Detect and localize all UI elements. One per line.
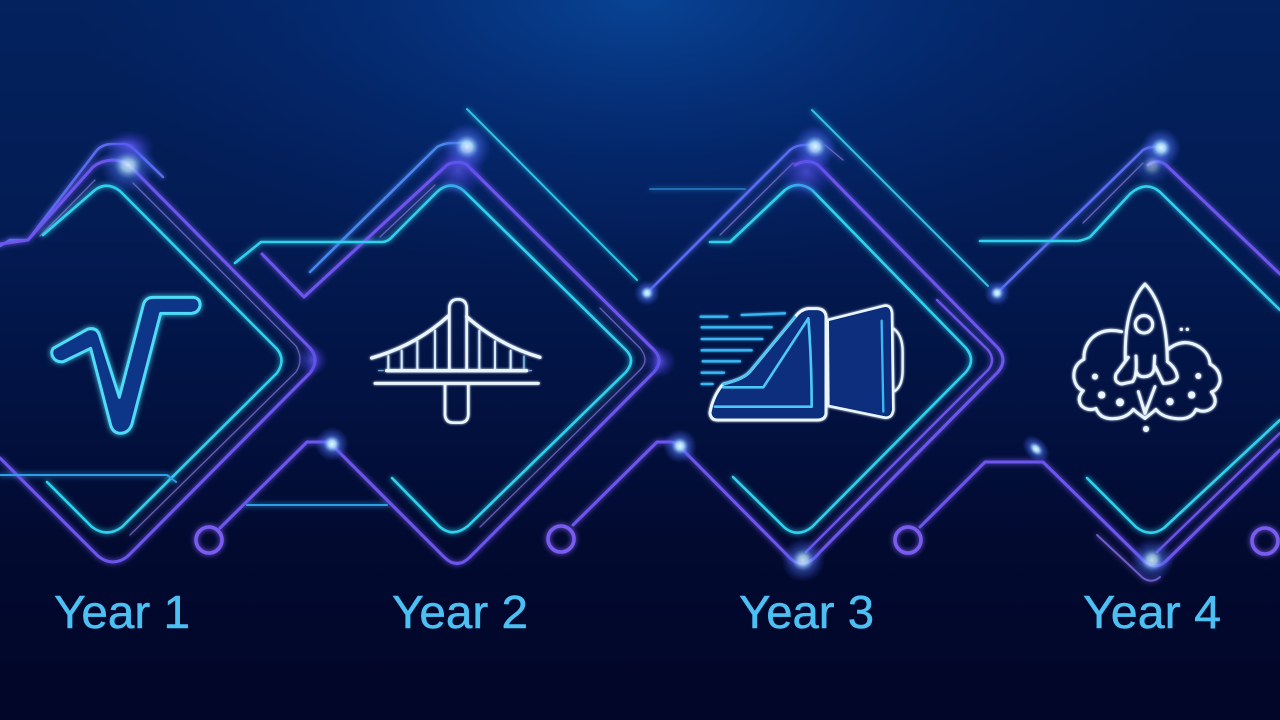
thin upper line (1083, 163, 1143, 223)
exhaust (1138, 387, 1155, 413)
outer upper line (0, 144, 163, 246)
diagonal accent line (467, 109, 637, 280)
rocket body (1125, 284, 1167, 360)
panel: year 3 diamond (573, 110, 1003, 564)
window (1135, 316, 1153, 333)
connector notch and purple frame (220, 162, 659, 564)
icon: square root (52, 297, 200, 433)
cyan frame (43, 186, 282, 532)
fins (1115, 356, 1177, 384)
panel: year 2 diamond (220, 109, 659, 564)
lower cyan frame (1087, 420, 1280, 533)
inner cone line (882, 321, 883, 412)
label: Year 4: Year 4 (1083, 586, 1221, 638)
cyan frame (980, 186, 1280, 310)
main purple frame (0, 160, 315, 562)
icon: bridge (372, 299, 540, 423)
horn body (828, 306, 893, 418)
purple frame (573, 162, 1003, 564)
lower purple frame (920, 450, 1280, 566)
icon: rocket with clouds (1074, 284, 1220, 432)
panel: year 4 diamond (920, 147, 1280, 581)
folded body (710, 309, 826, 420)
diagonal accent line (812, 110, 988, 286)
upper outer line (310, 143, 465, 272)
thin inner line (380, 185, 645, 527)
inner fold (715, 317, 812, 407)
upper outer line (997, 147, 1165, 293)
blue baseline (247, 504, 387, 506)
cyan frame (710, 185, 971, 533)
left cloud (1074, 330, 1145, 419)
thin inner line (40, 180, 300, 535)
connector rings (196, 526, 1278, 554)
dots (1092, 328, 1201, 432)
label: Year 1: Year 1 (54, 586, 190, 638)
glowing nodes (100, 123, 1181, 582)
label: Year 3: Year 3 (739, 586, 874, 638)
handle (893, 328, 903, 392)
lower echo line (1097, 535, 1160, 581)
label: Year 2: Year 2 (392, 586, 528, 638)
panel: year 1 diamond (0, 144, 315, 562)
speed lines (701, 313, 785, 384)
thin upper line (720, 163, 793, 235)
second purple line (1157, 433, 1280, 552)
icon: megaphone (701, 306, 903, 420)
right cloud (1145, 343, 1220, 419)
cyan frame (235, 186, 631, 532)
blue baseline (0, 475, 176, 482)
second purple line (806, 300, 992, 552)
upper outer line and flare (647, 145, 815, 293)
purple frame (1148, 162, 1280, 274)
faint horizontal (650, 188, 745, 190)
